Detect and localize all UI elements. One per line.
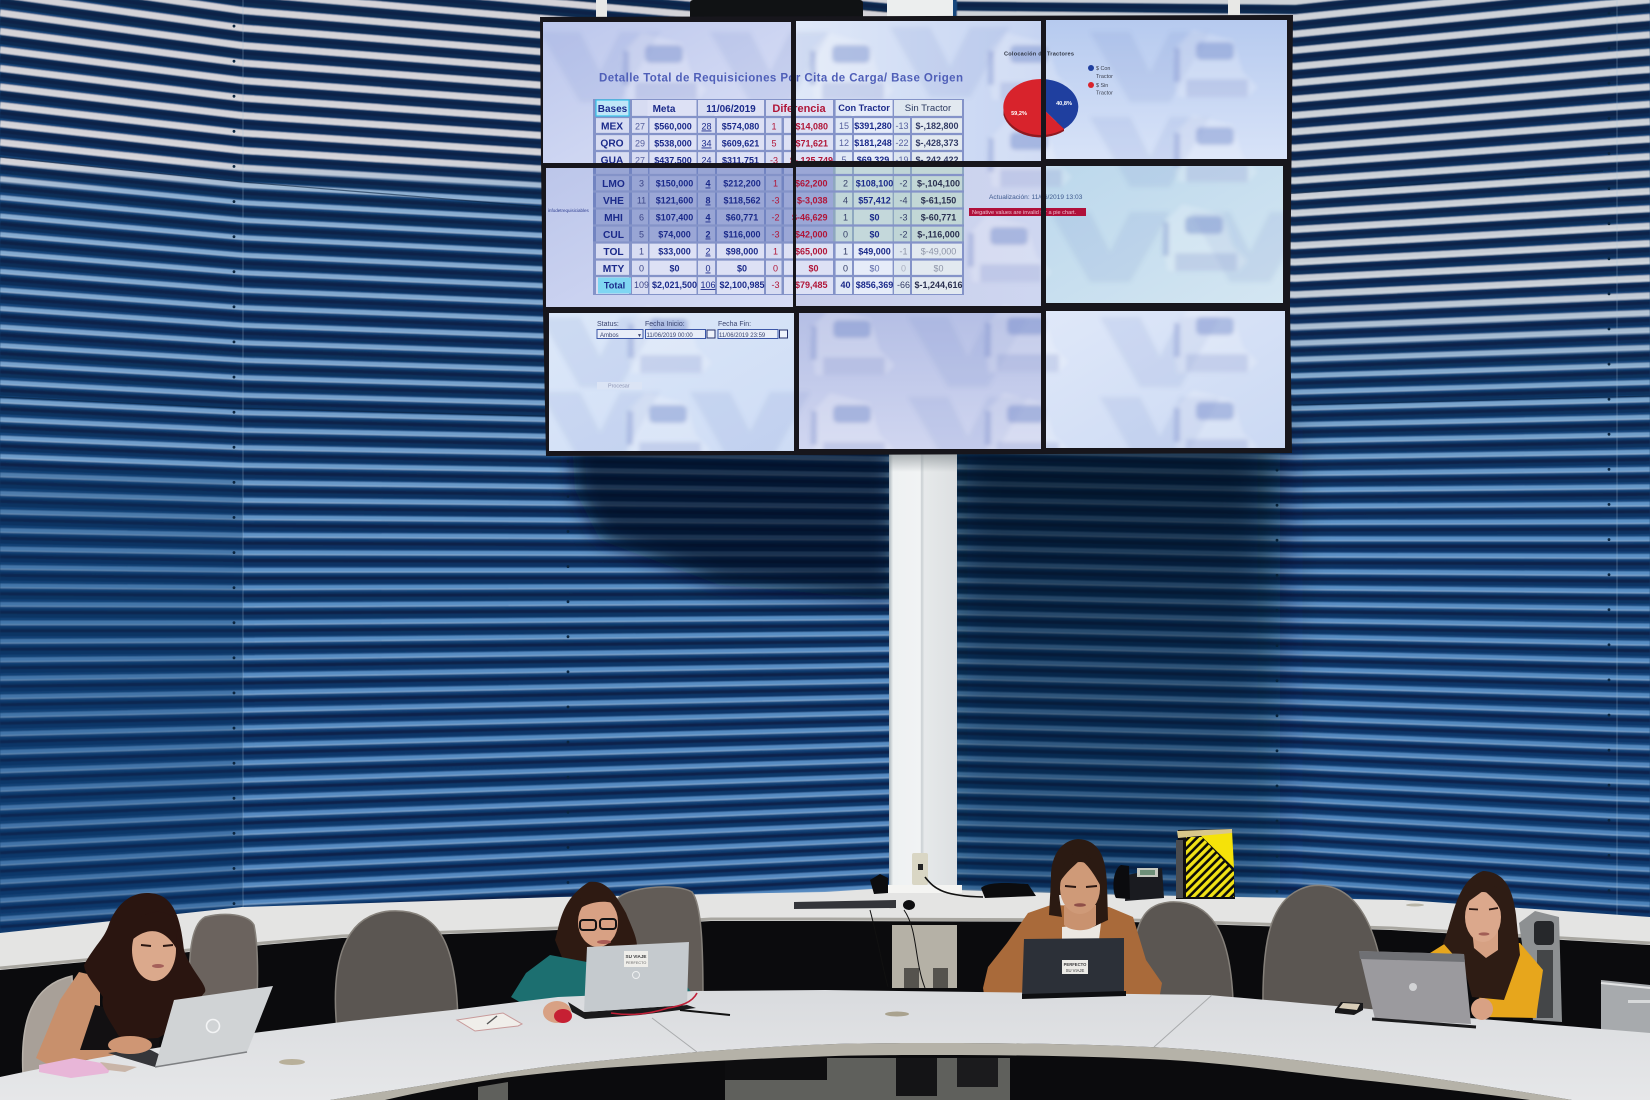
lower rows: 4 <box>705 212 711 222</box>
upper rows: $574,080 <box>722 122 759 132</box>
upper rows: -13 <box>895 121 909 131</box>
lower rows: $856,369 <box>856 280 893 290</box>
pie chart legend: Tractor <box>1096 90 1113 96</box>
upper rows: $181,248 <box>854 138 892 148</box>
upper rows: QRO <box>600 138 624 150</box>
pink notebook and phone <box>39 1058 137 1078</box>
lower rows: Total <box>604 280 625 290</box>
upper rows: $609,621 <box>722 138 759 148</box>
video wall <box>540 15 1310 467</box>
filter form: Procesar <box>608 384 630 390</box>
faded truck wallpaper <box>540 27 1310 467</box>
dark laptop: leather jacket woman <box>1022 938 1126 999</box>
lower rows: 5 <box>639 230 644 240</box>
front curved desk <box>0 904 1650 1100</box>
lower rows: $-1,244,616 <box>914 280 963 290</box>
desk top surface <box>0 990 1650 1100</box>
table header: Meta <box>653 104 676 115</box>
table title: Detalle Total de Requisiciones Por Cita de Carga/ Base Origen <box>599 72 963 84</box>
lower rows: 1 <box>843 246 848 256</box>
lower rows: $79,485 <box>795 280 828 290</box>
filter form: Fecha Fin: <box>718 321 751 328</box>
shadow cast by the video wall <box>572 430 1280 940</box>
lower rows: 3 <box>639 178 644 188</box>
filter form <box>597 321 788 390</box>
column base and wall outlet <box>870 853 983 988</box>
woman with tan leather jacket <box>983 839 1162 1000</box>
woman with black top and curly hair <box>36 893 205 1064</box>
table header: 11/06/2019 <box>706 104 756 115</box>
pie chart: colocacion de tractores: 40,8% <box>1056 101 1072 107</box>
lower rows: -2 <box>899 178 908 188</box>
pie chart legend: Tractor <box>1096 74 1113 80</box>
lower rows: 2 <box>705 230 711 240</box>
upper rows: 29 <box>635 138 645 148</box>
lower rows: $49,000 <box>858 246 891 256</box>
lower rows: $-,104,100 <box>917 178 960 188</box>
lower rows: $0 <box>737 264 747 274</box>
lower rows: CUL <box>603 230 624 241</box>
laptop with sticker: green sweater woman <box>543 942 730 1023</box>
upper rows: $69,329 <box>857 155 889 165</box>
upper rows: $-,125,749 <box>790 156 833 166</box>
lower rows: 6 <box>639 212 644 222</box>
lower rows: $118,562 <box>723 196 761 206</box>
lower rows: $212,200 <box>723 178 761 188</box>
lower rows: MTY <box>603 264 624 275</box>
upper rows: 5 <box>771 138 777 148</box>
lower rows: $65,000 <box>795 246 828 256</box>
lower rows: $150,000 <box>656 178 693 188</box>
upper rows: $71,621 <box>795 138 828 148</box>
lower rows: $0 <box>869 212 880 222</box>
lower rows: -66 <box>897 280 910 290</box>
lower rows: $116,000 <box>723 230 761 240</box>
dark laptop: leather jacket woman: PERFECTO <box>1064 962 1087 967</box>
mounting hardware above the screens <box>596 0 1240 22</box>
upper rows: MEX <box>601 122 623 132</box>
laptop with sticker: green sweater woman: PERFECTO <box>626 961 646 965</box>
lower rows: $0 <box>669 264 680 274</box>
phone on desk <box>1335 1002 1363 1015</box>
upper rows: 28 <box>701 122 712 132</box>
upper rows: $560,000 <box>654 122 692 132</box>
back counter and dark cabinet <box>0 888 1650 1090</box>
woman with yellow blouse <box>1430 871 1543 1018</box>
pie chart legend <box>1088 65 1113 96</box>
small side label: infodetrequisiciables <box>548 208 590 213</box>
desk front lip <box>330 1043 1572 1100</box>
lower rows: 0 <box>639 264 644 274</box>
black cables bundle <box>870 874 1036 898</box>
lower rows: $60,771 <box>726 212 758 222</box>
filter form: 11/06/2019 23:59 <box>719 333 766 339</box>
lower rows: -1 <box>899 246 908 256</box>
table header: Con Tractor <box>838 103 890 113</box>
desk telephone <box>1113 865 1164 901</box>
lower rows: LMO <box>602 179 625 190</box>
red warning bar: Negative values are invalid for a pie chart. <box>972 210 1077 216</box>
lower rows: -2 <box>899 230 908 240</box>
red warning bar <box>969 208 1086 216</box>
upper rows: -22 <box>895 138 909 148</box>
lower rows: VHE <box>603 196 624 207</box>
lower rows: 4 <box>843 196 848 206</box>
lower rows: 1 <box>773 246 778 256</box>
upper rows: $311,751 <box>722 156 759 166</box>
lower rows: $62,200 <box>795 178 828 188</box>
lower rows: $0 <box>869 264 880 274</box>
pie chart legend: $ Con <box>1096 66 1110 72</box>
chair backs <box>23 885 1387 1075</box>
lower rows: $33,000 <box>658 246 691 256</box>
lower rows: 2 <box>705 246 711 256</box>
lower rows: 109 <box>634 280 649 290</box>
lower rows: $0 <box>869 230 880 240</box>
table header: Diferencia <box>772 103 826 115</box>
upper rows: 15 <box>839 121 849 131</box>
lower rows: $2,021,500 <box>652 280 697 290</box>
lower rows: $98,000 <box>726 246 758 256</box>
lower rows: 0 <box>843 264 848 274</box>
upper rows: $-,428,373 <box>915 138 959 148</box>
lower rows: -3 <box>771 280 780 290</box>
filter form: 11/06/2019 00:00 <box>646 333 693 339</box>
lower rows: 0 <box>901 264 906 274</box>
lower rows: 0 <box>773 264 778 274</box>
filing drawer <box>1601 980 1650 1036</box>
upper rows: 27 <box>635 156 645 166</box>
table header <box>598 104 952 112</box>
pie chart: colocacion de tractores: Colocación de Tractores <box>1004 52 1074 58</box>
dark laptop: leather jacket woman: SU VIAJE <box>1066 968 1085 973</box>
upper rows: 24 <box>701 156 712 166</box>
filter form: ▼ <box>637 333 642 339</box>
table header: Bases <box>598 104 628 115</box>
lower rows: $0 <box>933 264 944 274</box>
lower rows: 1 <box>843 212 848 222</box>
filter form: Ambos <box>600 333 619 339</box>
lower rows: $57,412 <box>858 196 891 206</box>
pie chart: colocacion de tractores: 59,2% <box>1011 111 1027 117</box>
lower rows: $-,116,000 <box>917 230 960 240</box>
upper rows: 1 <box>771 122 777 132</box>
lower rows: 1 <box>639 246 644 256</box>
grey fan tower <box>1519 911 1562 1022</box>
upper rows: $538,000 <box>654 138 692 148</box>
lower rows: 11 <box>637 196 646 206</box>
lower rows: -4 <box>899 196 908 206</box>
lower rows: 0 <box>705 264 711 274</box>
lower rows: -3 <box>771 230 780 240</box>
upper rows: $437,500 <box>654 156 692 166</box>
update timestamp: Actualización: 11/06/2019 13:03 <box>989 194 1083 201</box>
grey laptop: yellow blouse woman <box>1359 951 1493 1027</box>
lower rows: 106 <box>700 280 716 290</box>
yellow and black magazine holder <box>1176 829 1235 899</box>
lower rows: $-3,038 <box>797 196 828 206</box>
upper rows <box>600 122 958 163</box>
filter form: Fecha Inicio: <box>645 321 685 328</box>
lower rows: $108,100 <box>856 178 893 188</box>
lower rows: 0 <box>843 230 848 240</box>
notebook and pen on desk <box>457 1013 522 1031</box>
lower rows: -2 <box>771 212 780 222</box>
lower rows: $-46,629 <box>792 212 828 222</box>
upper rows: 5 <box>841 155 847 165</box>
lower rows: 40 <box>840 280 851 290</box>
lower rows: MHI <box>604 213 623 224</box>
lower rows: TOL <box>603 247 624 258</box>
filter form: Status: <box>597 321 619 328</box>
upper rows: 12 <box>839 138 849 148</box>
lower rows: 2 <box>843 178 848 188</box>
pie chart: colocacion de tractores <box>1003 52 1078 137</box>
lower rows: $42,000 <box>795 230 828 240</box>
lower rows: $121,600 <box>656 196 693 206</box>
woman with green sweater <box>511 882 696 1018</box>
keyboard and mouse <box>794 900 915 910</box>
upper rows: 34 <box>701 138 712 148</box>
laptop: curly hair woman <box>108 986 273 1067</box>
upper rows: 27 <box>635 122 645 132</box>
requisition data table <box>593 99 964 295</box>
lower rows <box>602 178 963 290</box>
lower rows: 1 <box>773 178 778 188</box>
carpet under desk <box>478 1058 1010 1100</box>
upper rows: GUA <box>601 156 624 166</box>
table header: Sin Tractor <box>905 103 952 114</box>
upper rows: -19 <box>895 155 909 165</box>
screen content <box>540 20 1310 467</box>
lower rows: $74,000 <box>658 230 691 240</box>
lower rows: -3 <box>771 196 780 206</box>
upper rows: $14,080 <box>795 122 828 132</box>
lower rows: 4 <box>705 178 711 188</box>
lower rows: $-61,150 <box>921 196 956 206</box>
lower rows: $-49,000 <box>921 246 956 256</box>
upper rows: $391,280 <box>854 121 892 131</box>
lower rows: $0 <box>808 264 819 274</box>
lower rows: $107,400 <box>656 212 693 222</box>
laptop with sticker: green sweater woman: SU VIAJE <box>626 954 646 959</box>
upper rows: $-,242,422 <box>915 155 959 165</box>
cable outlet box <box>892 925 957 988</box>
upper rows: -3 <box>770 156 778 166</box>
lower rows: $-60,771 <box>921 212 956 222</box>
pie chart legend: $ Sin <box>1096 83 1108 89</box>
white central column <box>889 450 957 890</box>
lower rows: $2,100,985 <box>719 280 765 290</box>
lower rows: 8 <box>705 196 711 206</box>
lower rows: -3 <box>899 212 908 222</box>
upper rows: $-,182,800 <box>915 121 959 131</box>
